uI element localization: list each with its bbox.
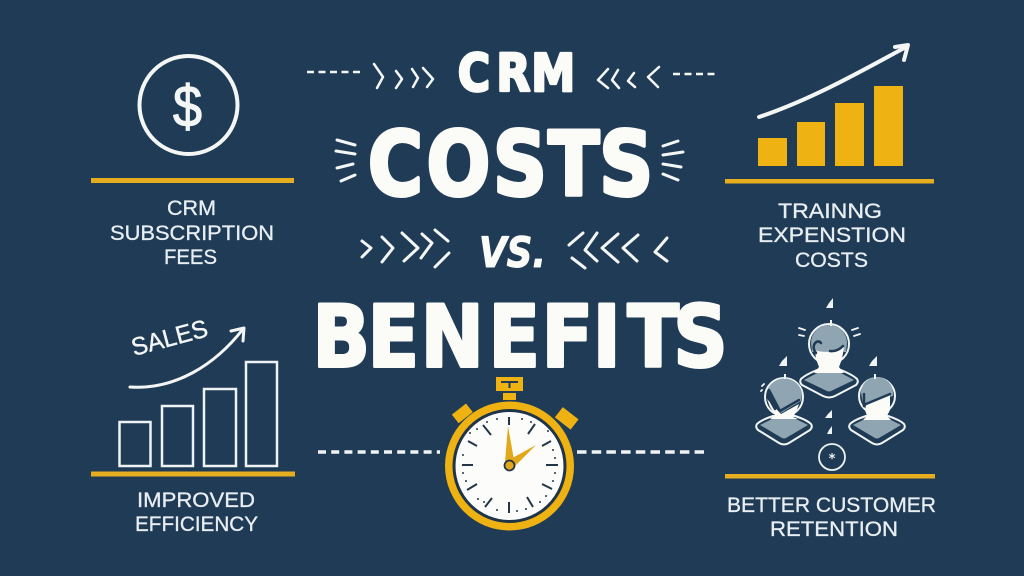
crown [496,377,523,391]
bar chart: yellow bars with arrow [758,45,908,166]
decorative ticks beside COSTS [336,140,683,181]
icon: dollar coin: $ [173,74,202,139]
icon: customer group [756,298,905,470]
icon: dollar coin [140,56,238,154]
clock hands [505,426,514,462]
label: CRM subscription fees: SUBSCRIPTION [110,222,274,245]
label: improved efficiency: EFFICIENCY [135,513,258,536]
divider [91,178,294,183]
title word: CRM: CRM [458,44,575,104]
target circle [819,444,845,470]
panel: CRM subscription fees [91,56,294,269]
small marks [779,298,877,434]
label: better customer retention: BETTER CUSTOMER [727,494,936,517]
label: better customer retention: RETENTION [770,518,898,541]
bar chart: outlined bars [120,362,277,466]
sales arrow: SALES [128,315,211,362]
label: training costs: TRAINNG [778,200,882,223]
title: CRM Costs vs. Benefits [312,44,728,388]
dashed lines beside stopwatch [318,450,704,454]
label: improved efficiency: IMPROVED [137,489,255,512]
label: training costs: COSTS [795,249,868,272]
label: improved efficiency [135,489,258,536]
label: CRM subscription fees: FEES [164,246,217,269]
panel: better customer retention [725,298,936,541]
label: training costs [758,200,906,272]
decorative chevrons beside vs. [362,230,667,268]
hour ticks [462,417,558,513]
minute dots [462,418,556,512]
panel: training expenses [725,45,934,272]
icon: stopwatch [445,377,579,530]
sales arrow [128,315,244,387]
divider [725,179,934,184]
label: CRM subscription fees [110,197,274,269]
title word: COSTS: COSTS [368,114,653,217]
label: training costs: EXPENSTION [758,224,906,247]
face [445,402,574,530]
icon: customer group: * [829,452,836,467]
person: right [849,377,905,444]
label: better customer retention [727,494,936,541]
divider [725,474,935,478]
title word: BENEFITS: BENEFITS [312,288,728,388]
side buttons [452,404,473,423]
label: CRM subscription fees: CRM [167,197,216,220]
title word: vs.: VS. [479,228,546,277]
divider [91,472,295,476]
person: top [800,324,858,398]
panel: improved efficiency [91,315,295,536]
decorative chevrons beside CRM [307,64,717,88]
person: left [756,378,812,444]
